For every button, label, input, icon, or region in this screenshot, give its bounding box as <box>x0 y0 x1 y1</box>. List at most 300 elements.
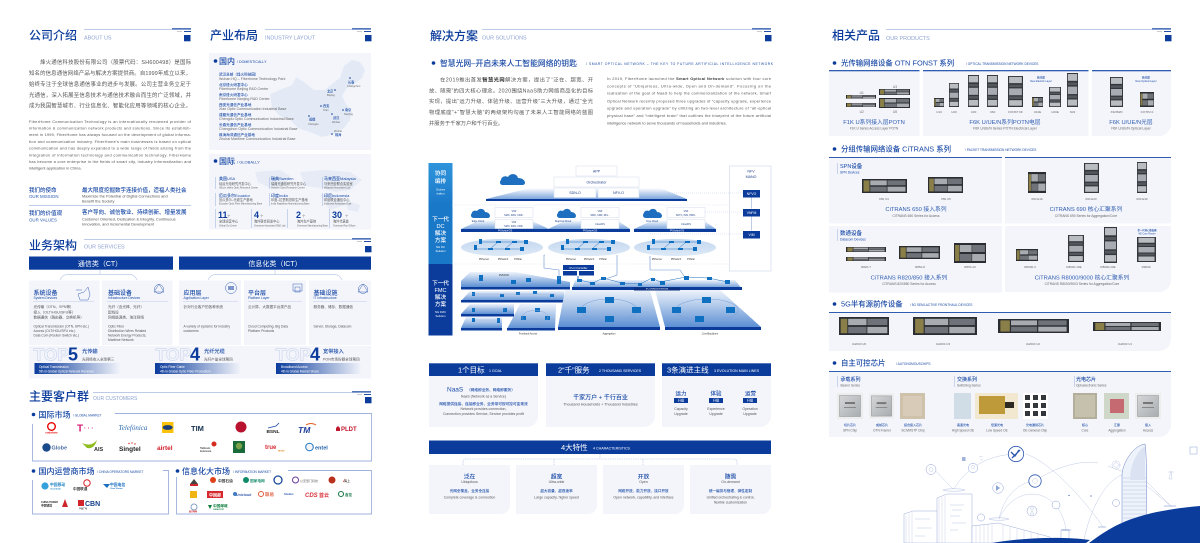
panel: CITRANS R8000/9000: NE Core Router <box>1138 232 1156 236</box>
panel: one goal <box>429 363 538 427</box>
architecture diagram <box>428 163 771 336</box>
core cloud stack: CloudOS <box>681 223 691 226</box>
panel: CITRANS R8000/9000: R8000-3 <box>1024 265 1036 269</box>
panel: F1K series: U5 <box>893 110 897 114</box>
section heading: smart optical network: / SMART OPTICAL NETWORK – THE KEY TO FUTURE ARTIFICIAL INTELLIGENCE NETWORK <box>586 62 774 66</box>
lane: next-gen DC: 解决 <box>435 229 446 237</box>
heading: domestically <box>214 56 267 66</box>
panel: china operators market: / CHINA OPERATORS MARKET <box>97 470 143 474</box>
panel: one goal: NaaS (Network as a Service) <box>461 394 506 398</box>
section heading: autonomous chips: 自主可控芯片 <box>841 359 885 368</box>
ranking: broadband access <box>276 344 362 374</box>
edge cloud stack: PVSwitch/OS <box>498 230 513 232</box>
edge cloud stack: VNF <box>512 221 517 224</box>
card: on-demand <box>690 465 771 514</box>
panel: evolution main lines: 升级 <box>713 398 720 403</box>
series: bearer: Bearer Series <box>840 384 860 388</box>
enterprise logos: 中国邮政 <box>213 503 228 508</box>
site list: 武汉总部（烽火科技园） <box>219 72 259 77</box>
card: ubiquitous: Complete coverage & connection <box>444 496 495 500</box>
regional cloud stack: PVSwitch/OS <box>583 230 598 232</box>
overseas statistics: 海外代表处 <box>333 219 350 224</box>
core cloud stack: VNF <box>684 210 689 213</box>
overseas statistics: Global Op Center <box>219 224 237 228</box>
overseas statistics: Overseas Manufacturing Base <box>297 224 329 228</box>
map of China <box>270 60 365 137</box>
card: open: Open network, capability, and interface <box>613 496 674 500</box>
panel: evolution main lines: Operation <box>742 407 758 411</box>
panel: CITRANS R820/850 <box>829 226 1002 292</box>
site list: Changchun Optic Communication Industrial Base <box>219 127 298 131</box>
ranking: broadband access: 宽带接入 <box>323 347 345 355</box>
city markers: Nanjing <box>344 112 353 116</box>
series: optoelectronic: Access <box>1143 428 1154 432</box>
overseas sites: 厄瓜多尔Ecuador <box>219 192 251 198</box>
ranking: optical transmission: TOP <box>34 344 69 364</box>
overseas sites: 美国USA <box>219 175 236 181</box>
core cloud stack: Core Cloud <box>646 220 659 223</box>
NFV MANO column: VIM <box>748 233 755 237</box>
ranking: optical transmission: 5th in Global Optical Network Revenue <box>39 370 94 374</box>
text block: solution Chinese: 物理底座”+“智慧大脑”的两级架构勾画了未来人工智能网络的蓝图 <box>429 108 593 116</box>
card: infrastructure devices: 配线设 <box>108 309 119 314</box>
overseas statistics: 4 <box>254 210 259 220</box>
edge cloud stack: VNF <box>512 210 517 213</box>
overseas sites: 马来西亚Malaysia <box>324 175 357 181</box>
series: bearer: SPN Chip <box>843 428 857 432</box>
series: optoelectronic: Aggregation <box>1108 428 1126 432</box>
section heading: CITRANS <box>833 145 1036 154</box>
card: application layer: 应用层 <box>184 289 202 297</box>
panel: one goal: Connection provides Service, Service provides profit <box>443 412 524 416</box>
site list: Xian Optic Communication Industrial Base <box>219 107 286 111</box>
edge cloud stack: SMO, RAN, CDR.. <box>504 214 524 217</box>
card: platform layer: Platform Products <box>248 329 275 333</box>
DC fabric ellipses: PNSwitch <box>584 258 595 261</box>
operator logos: China Mobile <box>50 488 61 490</box>
series: bearer: SCh/MSTP Chip <box>901 428 925 432</box>
panel: one goal: 1个目标 <box>458 364 485 374</box>
logos row two: Indonesia <box>200 450 212 453</box>
card: application layer <box>179 280 241 345</box>
core cloud stack: SCTC, IMS, HMO.. <box>676 214 696 217</box>
card: on-demand: flexible customization <box>714 500 747 504</box>
header: our products <box>832 28 1172 42</box>
NFV MANO column: VNFM <box>747 211 756 215</box>
section heading: OTN FONST <box>833 59 1038 68</box>
overseas sites: Sweden Optic Research Center <box>271 186 305 190</box>
panel: F6K optical: X320WD <box>1110 110 1123 114</box>
DC fabric ellipses <box>461 239 716 261</box>
text block: solution Chinese <box>429 75 594 127</box>
card: system devices: Data Com (Router/ Switch etc.) <box>34 334 79 338</box>
panel: F6K electrical: U20E <box>1051 110 1059 114</box>
overseas sites: India Rajasthan Manufacturing Base <box>271 202 310 206</box>
header: industry layout: 产业布局 <box>210 28 258 42</box>
card: system devices: Optical Transmission (OTN, SPN etc.) <box>34 324 89 328</box>
section heading: autonomous chips <box>833 359 930 368</box>
card: ubiquitous <box>429 465 510 514</box>
core cloud stack <box>634 208 716 232</box>
logos row two: entel <box>315 446 328 452</box>
logos row two: Telkom <box>200 446 211 450</box>
lane: next-gen FMC: 解决 <box>435 293 446 301</box>
city markers: 西安 <box>323 103 329 108</box>
card: open: 网络开放、能力开放、接口开放 <box>618 488 669 493</box>
edge cloud stack <box>461 208 549 232</box>
header: our products: 相关产品 <box>832 28 880 42</box>
logos row two <box>42 440 328 453</box>
panel: F1K series: U3 <box>893 85 897 89</box>
panel: CITRANS R8000/9000: R8000-10E <box>1066 265 1082 269</box>
card: platform layer <box>244 280 306 345</box>
banner: four characteristics <box>429 440 771 454</box>
DC fabric ellipses: PNServer <box>479 258 489 261</box>
card: platform layer: 平台层 <box>248 289 266 297</box>
header: our services <box>29 238 372 252</box>
operator logos: 中国广电 <box>79 506 87 510</box>
core cloud stack: PVSwitch/OS <box>670 230 685 232</box>
header: our services: 业务架构 <box>29 238 77 252</box>
section heading: CITRANS: 分组传输网络设备 CiTRANS 系列 <box>841 145 951 154</box>
series: switching: Switching Series <box>957 384 981 388</box>
mission <box>29 186 187 204</box>
series: switching <box>952 376 1048 432</box>
DC fabric ellipses: PNStar <box>599 258 607 261</box>
header: our products: OUR PRODUCTS <box>886 36 930 42</box>
logos row two: Singtel <box>119 446 141 453</box>
header: company intro: 公司介绍 <box>29 28 77 42</box>
panel: CITRANS 650: 650 U5 <box>941 197 951 201</box>
ranking: broadband access: Broadband Access <box>281 365 308 369</box>
text block: solution English: realization of the goal of NaaS to help the commercialization of the network, Smart <box>607 91 772 96</box>
card: infrastructure devices: Infrastructure Devices <box>108 296 140 300</box>
text block: solution English: concepts of “Ubiquitous, Ultra-wide, Open and On-demand”. Focusing on the <box>607 83 771 88</box>
card: system devices: 接入（OLT/HGU/SFU等） <box>34 309 75 314</box>
FMC left access stack: Fronthaul Access <box>519 332 538 336</box>
values: Customer Oriented, Dedication & Integrity, Continuous <box>82 216 176 222</box>
overseas sites: 印尼联合通信中心 <box>324 197 350 202</box>
card: ubiquitous: 泛在 <box>464 473 475 481</box>
lane: next-gen FMC: Solution <box>435 314 446 318</box>
text block: company intro Chinese: 知名的信息通信网络产品与解决方案提供商。自1999年成立以来， <box>29 69 191 77</box>
world map <box>255 170 362 212</box>
city markers: 南京 <box>345 107 351 112</box>
lane: next-gen FMC: 下一代 <box>432 279 449 287</box>
panel: F6K electrical: F6K U/UE/N Series POTN Electrical Layer <box>973 127 1038 131</box>
header: our solutions: OUR SOLUTIONS <box>482 36 527 42</box>
panel: one goal: 1 GOAL <box>489 369 502 373</box>
panel: F1K series: F1K U系列接入层POTN <box>843 118 905 126</box>
panel: CITRANS 690: CiTRANS 690 核心汇聚系列 <box>1050 205 1123 213</box>
panel: evolution main lines: 运力 <box>675 390 687 398</box>
regional cloud stack: VNF <box>598 210 603 213</box>
city markers: 武汉 <box>333 115 340 120</box>
mission: 最大限度挖掘数字连接价值，造福人类社会 <box>82 186 187 194</box>
banner: CT <box>29 256 173 270</box>
text block: company intro Chinese: 成为我国智慧城市、行业信息化、智能化应用等领域的核心企业。 <box>29 102 191 110</box>
panel: F6K electrical: New Electric Layer <box>1030 79 1052 83</box>
panel: 5G devices: IA2000 U2 <box>1026 342 1040 346</box>
panel: thousand services <box>546 363 655 427</box>
enterprise logos: 南方电网 <box>189 510 197 514</box>
section heading: 5G fronthaul <box>833 300 972 309</box>
series: switching: Low Speed OE <box>986 428 1008 432</box>
overseas statistics: 个 <box>260 214 264 218</box>
card: system devices: 数据通信（路由器、交换机等） <box>34 314 84 320</box>
panel: information market: 信息化大市场 <box>182 466 230 476</box>
regional cloud stack: SMO, CDR, RFL.. <box>590 214 610 217</box>
overseas sites: 瑞典光通信研究开发中心 <box>271 181 307 186</box>
enterprise logos: 公安部门科技 <box>300 478 318 483</box>
header: industry layout: INDUSTRY LAYOUT <box>265 36 316 42</box>
panel: F1K series: F1K U Series Access Layer POTN <box>850 127 899 131</box>
site list: Fiberhome Nanjing R&D Center <box>219 97 271 101</box>
panel: china operators market <box>32 466 169 514</box>
NFV MANO column: MANO <box>746 175 757 179</box>
edge cloud stack: Edge Cloud <box>472 220 485 223</box>
banner: ICT: 信息化类（ICT） <box>248 259 302 268</box>
panel: F6K electrical: U30 <box>971 110 977 114</box>
overseas sites: 印度India <box>271 192 288 198</box>
panel: CITRANS 690: CiTRANS 690 Series for Aggregation/Core <box>1055 214 1117 218</box>
panel: F6K electrical: U10 <box>936 110 942 114</box>
city markers <box>308 77 361 137</box>
operator logos: CBN <box>85 501 100 508</box>
FMC controller: IP+O Controller <box>570 266 588 270</box>
panel: CITRANS R8000/9000: 新一代核心路由器 <box>1137 228 1157 232</box>
operator logos: China Telecom <box>110 488 123 490</box>
logos row two: move <box>278 450 285 452</box>
overseas statistics: 海外联合研发中心 <box>254 219 280 224</box>
ranking: fiber cable: Optic Fiber Cable <box>160 365 185 369</box>
text block: solution Chinese: 在2019推出首发智慧光网解决方案，提出了“泛在、超宽、开 <box>440 75 594 83</box>
FMC controller <box>544 255 684 282</box>
ranking: fiber cable: 光纤产量全球第四 <box>204 356 233 362</box>
card: application layer: Application Layer <box>184 296 210 300</box>
panel: global market: 国际市场 <box>38 409 70 419</box>
card: open: 开放 <box>638 473 649 481</box>
panel: CITRANS R8000/9000: CiTRANS R8000/9003 Series for Aggregation/Core <box>1045 282 1120 286</box>
panel: F6K electrical <box>923 70 1088 136</box>
logos row one: · · · <box>84 426 93 432</box>
section heading: CITRANS: / PACKET TRANSMISSION NETWORK DEVICES <box>965 148 1036 152</box>
panel: CITRANS R8000/9000 <box>1005 226 1171 292</box>
site list: 北京烽火研发中心 <box>219 82 248 87</box>
header: our solutions <box>430 28 772 43</box>
site list: 西安光通信产业基地 <box>219 102 252 107</box>
illustration: smart city skyline <box>904 444 1200 543</box>
lane: next-gen FMC: NG FMC <box>435 310 446 314</box>
card: infrastructure devices: Optic Fiber <box>108 324 125 328</box>
card: application layer: customers <box>184 329 199 333</box>
overseas sites: 厄瓜多尔–光缆生产基地 <box>219 197 253 202</box>
card: system devices: Access (OLT/HGU/SFU etc.) <box>34 329 75 333</box>
banner: CT: 通信类（CT） <box>78 259 122 268</box>
panel: 5G devices: IA2000 U3 <box>936 342 950 346</box>
lane: collaborative orchestration <box>428 163 452 205</box>
enterprise logos: 中国邮 <box>209 492 221 498</box>
overseas sites: 马来西亚联合实验室 <box>324 181 353 186</box>
enterprise logos: CDS <box>305 493 318 499</box>
orchestration platform: APP <box>593 170 601 174</box>
heading: domestically: 国内 <box>219 56 235 66</box>
overseas sites: 印度–拉贾斯坦邦生产基地 <box>271 197 309 202</box>
card: infrastructure devices: Distribution Wires Related <box>108 329 146 333</box>
text block: company intro English: tion and communication industry. FiberHome's main businesses is based on optical <box>29 139 191 144</box>
enterprise logos: 海上 <box>344 478 350 483</box>
DC fabric ellipses: PNStar <box>687 258 695 261</box>
overseas statistics: 个 <box>345 214 349 218</box>
ranking: fiber cable: TOP <box>156 344 191 364</box>
panel: CITRANS R820/850: R850-10 <box>964 265 976 269</box>
card: IT infrastructure: 基础设施 <box>314 289 338 297</box>
regional cloud stack: CloudOS <box>595 223 605 226</box>
text block: solution English: Optical Network recently proposed three upgrades of “capacity upgrade, experience <box>607 98 771 103</box>
overseas sites: 硅谷光电研究开发中心 <box>219 181 252 186</box>
section heading: OTN FONST: / OPTICAL TRANSMISSION NETWORK DEVICES <box>966 62 1038 66</box>
panel: evolution main lines: 体验 <box>710 390 722 398</box>
panel: CITRANS 650: SPN Devices <box>840 170 860 174</box>
site list: Chengdu Optic Communication Industrial Base <box>219 117 294 121</box>
series: switching: OE General Chip <box>1023 428 1047 432</box>
logos row two: Globe <box>52 446 67 452</box>
series: switching: 高速光电 <box>957 422 969 427</box>
panel: CITRANS R820/850: 数通设备 <box>840 229 863 237</box>
card: system devices: 系统设备 <box>34 289 58 297</box>
logos row one: T <box>77 424 83 434</box>
regional cloud stack <box>548 208 630 232</box>
panel: evolution main lines: 3 EVOLUTION MAIN LINES <box>714 369 760 373</box>
panel: F1K series <box>829 70 920 136</box>
panel: global layout <box>209 154 371 230</box>
logos row two: true <box>265 445 277 451</box>
text block: solution English <box>607 76 772 126</box>
card: on-demand: 统一编排与管理、弹性定制 <box>709 488 752 493</box>
panel: evolution main lines: Upgrade <box>674 412 688 416</box>
ranking: optical transmission <box>34 344 120 374</box>
ranking: fiber cable <box>155 344 241 374</box>
banner: four characteristics: 4大特性 <box>561 442 588 452</box>
section heading: smart optical network <box>432 58 774 68</box>
text block: company intro English: ment in 1999, FiberHome has always focused on the development of global informa- <box>29 132 192 137</box>
panel: F6K optical: 新光层 <box>1142 75 1150 79</box>
values: Innovation, and Incremental Development <box>82 222 155 227</box>
logos row two: AIS <box>94 447 104 453</box>
ranking: optical transmission: 5 <box>68 344 78 364</box>
city markers: Wuhan <box>332 120 341 124</box>
overseas sites: Silicon Valley Optic Research Center <box>219 186 258 190</box>
operator logos: 中国移动 <box>50 482 65 487</box>
logos row one: PLDT <box>341 427 357 433</box>
card: IT infrastructure: IT Infrastructure <box>314 296 337 300</box>
panel: china operators market: 国内运营商市场 <box>38 466 94 476</box>
heading: globally <box>214 157 260 166</box>
panel: F6K optical: OOTP2.0 <box>1141 110 1154 114</box>
panel: CITRANS 690: 690 E30 <box>1136 197 1148 201</box>
panel: evolution main lines: Experience <box>707 407 725 411</box>
panel: evolution main lines: 运营 <box>745 390 756 398</box>
panel: one goal: 网络提供连接、连接即业务、业务带可视可控可变现流 <box>439 401 528 406</box>
heading: domestically: / DOMESTICALLY <box>237 60 267 64</box>
header: our customers <box>29 388 372 404</box>
card: application layer: A variety of systems for industry <box>184 324 230 328</box>
DC fabric ellipses: PNServer <box>652 258 662 261</box>
section heading: autonomous chips: / AUTONOMOUSCHIPS <box>896 362 930 366</box>
city markers: Zhuhai <box>334 129 342 133</box>
panel: thousand services: 2“千”服务 <box>558 364 590 374</box>
card: ubiquitous: 光网全覆盖、业务全连接 <box>450 488 490 493</box>
left buildings <box>904 494 1069 543</box>
header: our customers: 主要客户群 <box>29 388 89 404</box>
FMC backbone and rings: Aggregation <box>603 332 616 336</box>
lane: next-gen DC: NG DC <box>436 245 445 249</box>
card: ultra-wide: 超宽 <box>551 473 562 481</box>
NFV MANO column: NFV <box>747 170 755 174</box>
site list: Wuhan HQ – Fiberhome Technology Park <box>219 77 286 81</box>
ranking: broadband access: 4 <box>310 344 320 364</box>
FMC backbone and rings: IP+O/SRv6/OTN/WDM <box>646 289 668 291</box>
banner: ICT <box>179 256 371 270</box>
text block: solution Chinese: 并服务于千家万户和千行百业。 <box>429 119 503 127</box>
city markers: 长春 <box>348 80 355 84</box>
card: ultra-wide <box>516 465 597 514</box>
text block: company intro Chinese: 光通信，深入拓展至信息技术与通信技术融合而生的广泛领域，并 <box>29 91 192 99</box>
panel: CITRANS R8000/9000: R9009 <box>1142 265 1151 269</box>
overseas statistics: 全球运营中心 <box>219 219 239 224</box>
panel: 5G devices: IA2000 U1 <box>1118 342 1132 346</box>
header: company intro <box>29 28 191 42</box>
overseas sites: Ecuador Optic Fiber Manufacturing Base <box>219 202 263 206</box>
text block: solution English: physical base” and “intelligent brain” that outlines the blueprint of the future artificial <box>607 113 771 118</box>
operator logos: CHINA TOWER <box>41 501 58 504</box>
card: system devices: System Devices <box>34 296 57 300</box>
mission: Benefit the Society <box>82 199 114 204</box>
card: infrastructure devices: 光纤（含光棒、光纤） <box>108 304 144 309</box>
text block: company intro English: has become a core enterprise in the fields of smart city, industry informatization and <box>29 159 191 164</box>
panel: F6K electrical: F6K U/UE/N系列POTN电层 <box>969 118 1041 126</box>
card: infrastructure devices: 基础设备 <box>108 289 132 297</box>
ranking: broadband access: 4th in Global Market Share <box>281 370 319 374</box>
panel: chips <box>829 371 1171 437</box>
text block: solution Chinese: 实现，提出“运力升级、体验升级、运营升级”三大升级，通过“全光 <box>429 97 594 105</box>
text block: company intro English <box>29 119 192 171</box>
mission: 我们的使命 <box>29 186 57 194</box>
card: infrastructure devices <box>102 280 172 345</box>
card: infrastructure devices: 网络能源类、海洋网络 <box>108 314 144 320</box>
panel: CITRANS 690: 690 E10 <box>1031 197 1043 201</box>
ranking: broadband access: TOP <box>276 344 311 364</box>
network arcs <box>930 454 1172 540</box>
panel: F1K series: U1 <box>860 91 864 95</box>
card: ubiquitous: Ubiquitous <box>461 480 478 484</box>
site list: Fiberhome Beijing R&D Center <box>219 87 269 91</box>
FMC left access stack <box>461 272 570 336</box>
ranking: broadband access: PON市场份额全球第四 <box>323 356 360 362</box>
card: infrastructure devices: Network Energy Products, <box>108 334 146 338</box>
lane: collaborative orchestration: Orches <box>436 188 446 192</box>
panel: F6K optical <box>1092 70 1171 136</box>
series: bearer: OTN Framer <box>873 428 892 432</box>
enterprise logos: 国家电网 <box>250 478 265 483</box>
panel: evolution main lines: Capacity <box>674 407 688 411</box>
site list: 南京烽火研发中心 <box>219 92 248 97</box>
overseas statistics: 个 <box>227 214 231 218</box>
series: optoelectronic: Core <box>1082 428 1089 432</box>
series: optoelectronic: 光电芯片 <box>1076 376 1096 383</box>
card: application layer: 针对行业客户的各种系统 <box>184 304 223 309</box>
overseas statistics: 30 <box>332 210 342 220</box>
